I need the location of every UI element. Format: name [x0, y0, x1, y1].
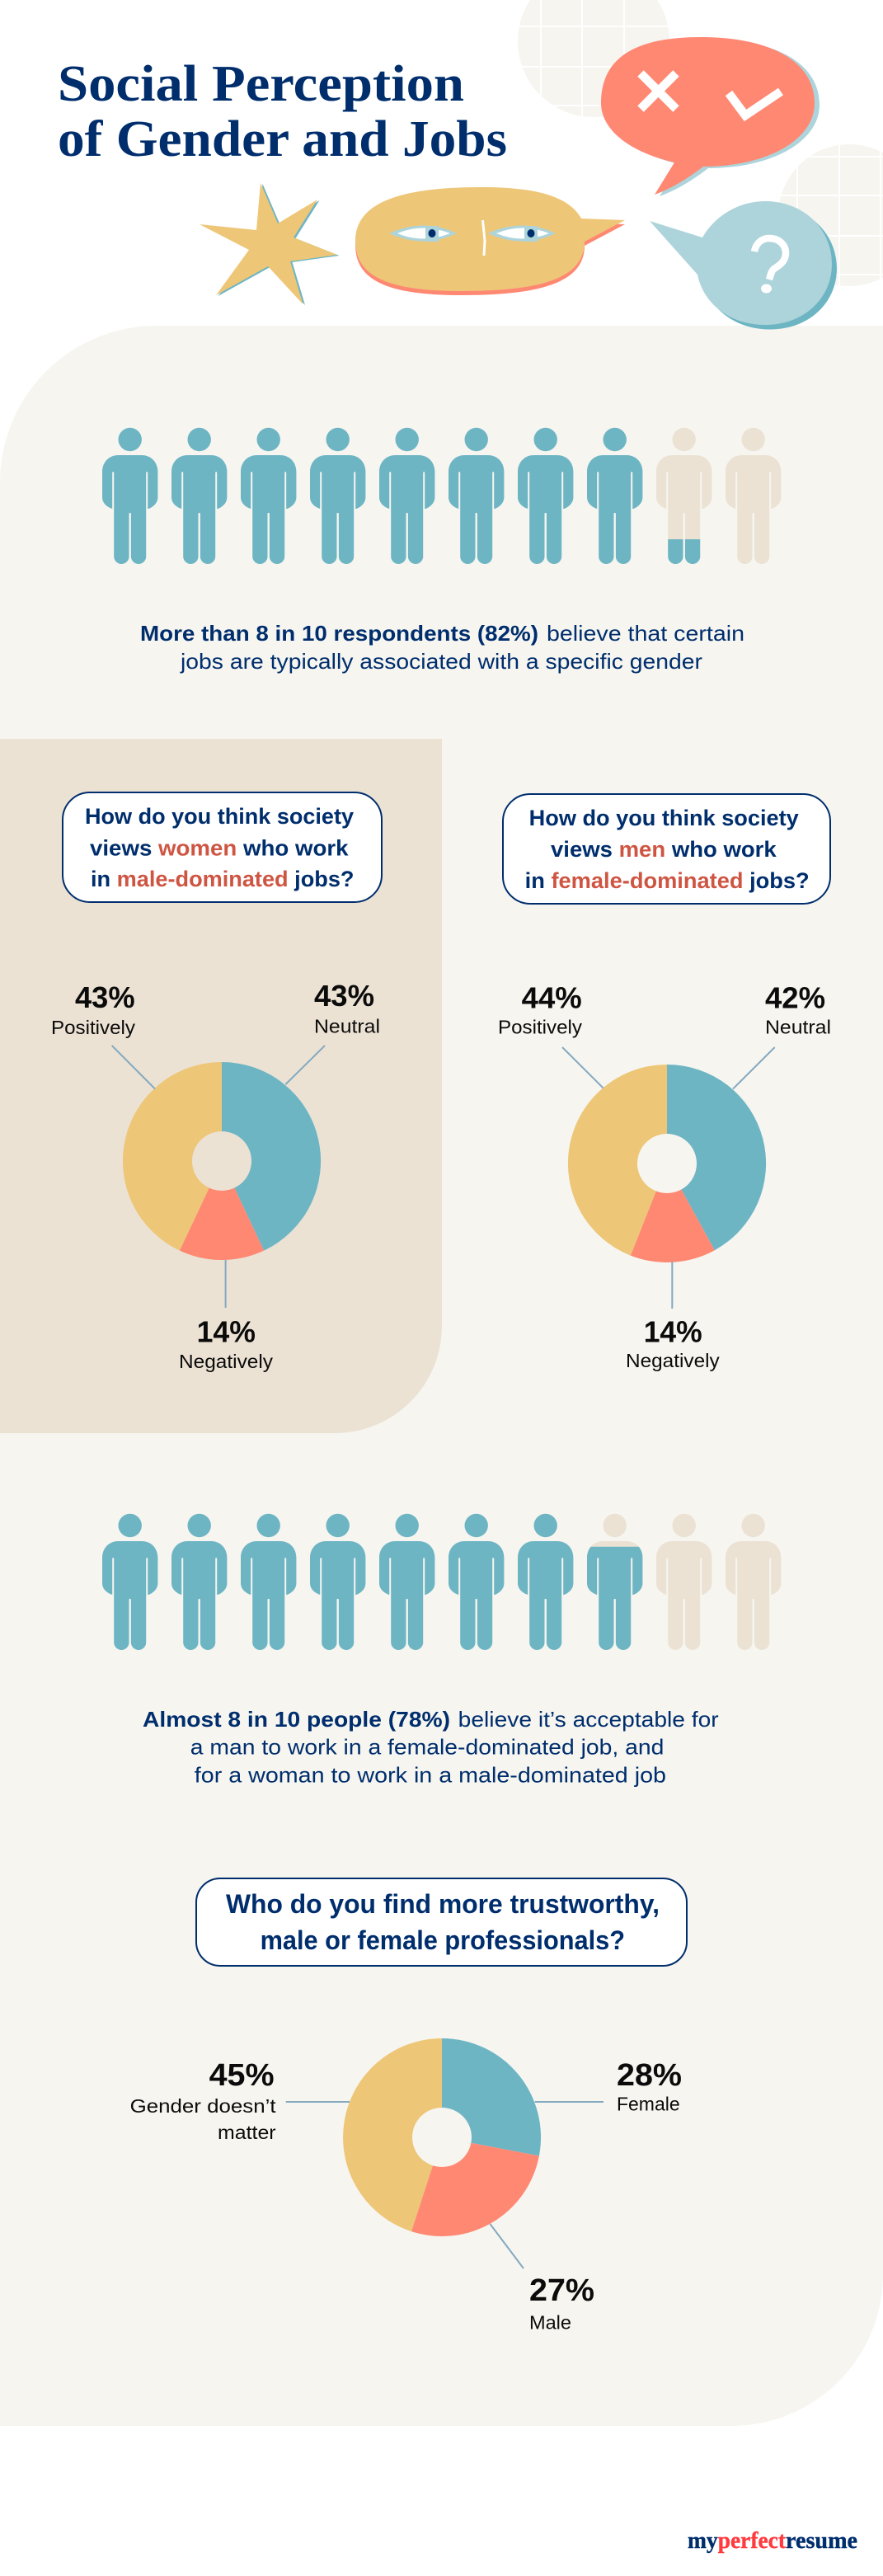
question box: men: in female-dominated jobs? — [525, 868, 810, 893]
label: neutral 43: 43% — [314, 979, 374, 1013]
label: neutral 42: Neutral — [765, 1016, 831, 1037]
pictogram: 82 percent row — [102, 428, 781, 564]
logo: myperfectresume: resume — [786, 2527, 857, 2554]
decorative grid circle top — [518, 0, 669, 117]
question box: women: views women who work — [90, 836, 349, 861]
leader lines: trustworthy — [286, 2102, 604, 2268]
leader lines: women — [112, 1046, 325, 1308]
title: of Gender and Jobs — [58, 111, 507, 167]
label: positively 43 — [51, 980, 136, 1038]
decorative grid circle right — [775, 140, 883, 289]
pictogram: 78 percent row — [102, 1514, 781, 1650]
label: female 28: Female — [617, 2094, 680, 2115]
logo: myperfectresume: my — [688, 2527, 718, 2554]
label: positively 44: Positively — [498, 1016, 583, 1037]
text: 78 percent statement: a man to work in a female-dominated job, and — [190, 1735, 664, 1760]
label: female 28 — [617, 2058, 682, 2115]
label: neutral 42: 42% — [765, 981, 825, 1014]
label: positively 43: Positively — [51, 1017, 136, 1038]
donut chart: trustworthy — [343, 2038, 541, 2236]
label: negatively 14: 14% — [644, 1314, 702, 1349]
label: neutral 43 — [314, 979, 380, 1037]
label: positively 44: 44% — [522, 981, 582, 1014]
question box: trustworthy: Who do you find more trustworthy, — [226, 1889, 660, 1919]
donut chart: men — [568, 1065, 766, 1262]
question box: men: How do you think society — [529, 806, 799, 830]
label: negatively 14 — [626, 1314, 720, 1371]
label: negatively 14: Negatively — [626, 1350, 720, 1371]
question box: women: in male-dominated jobs? — [91, 867, 355, 891]
title — [58, 56, 507, 167]
label: male 27: Male — [529, 2312, 571, 2334]
question box: men — [503, 794, 830, 904]
label: neutral 43: Neutral — [314, 1016, 380, 1037]
icon: yellow star burst — [200, 183, 340, 305]
label: gender doesn't matter 45: 45% — [209, 2058, 275, 2093]
text: 82 percent statement — [140, 621, 744, 674]
text: 78 percent statement: for a woman to work in a male-dominated job — [195, 1763, 666, 1788]
leader lines: men — [562, 1047, 775, 1309]
label: gender doesn't matter 45: Gender doesn’t — [130, 2095, 276, 2117]
text: 82 percent statement: More than 8 in 10 respondents (82%) — [140, 621, 538, 646]
text: 82 percent statement: jobs are typically associated with a specific gender — [180, 649, 702, 674]
label: gender doesn't matter 45: matter — [218, 2122, 276, 2143]
label: gender doesn't matter 45 — [130, 2058, 276, 2143]
label: positively 44 — [498, 981, 583, 1037]
label: negatively 14: 14% — [197, 1314, 256, 1349]
logo: myperfectresume: perfect — [718, 2527, 786, 2554]
label: neutral 42 — [765, 981, 831, 1037]
text: 78 percent statement — [143, 1707, 719, 1788]
text: 78 percent statement: believe it’s acceptable for — [458, 1707, 719, 1732]
icon: yellow speech bubble with face — [355, 187, 625, 295]
donut chart: women — [123, 1062, 321, 1260]
question box: trustworthy: male or female professionals? — [261, 1925, 625, 1955]
question box: women: How do you think society — [85, 804, 354, 829]
text: 78 percent statement: Almost 8 in 10 people (78%) — [143, 1707, 450, 1732]
label: male 27: 27% — [529, 2273, 594, 2308]
question box: trustworthy — [196, 1878, 687, 1966]
icon: coral speech bubble with cross and check — [601, 37, 820, 196]
question box: women — [63, 792, 382, 902]
panel: men in female-dominated jobs — [498, 794, 831, 1371]
question box: men: views men who work — [551, 837, 777, 862]
logo: myperfectresume — [688, 2527, 857, 2554]
label: female 28: 28% — [617, 2058, 682, 2093]
label: negatively 14: Negatively — [179, 1351, 274, 1372]
label: positively 43: 43% — [75, 980, 135, 1014]
icon: blue speech bubble with question mark — [650, 201, 837, 330]
panel: women in male-dominated jobs — [0, 739, 442, 1433]
text: 82 percent statement: believe that certain — [547, 621, 744, 646]
label: male 27 — [529, 2273, 594, 2334]
label: negatively 14 — [179, 1314, 274, 1372]
title: Social Perception — [58, 56, 464, 112]
